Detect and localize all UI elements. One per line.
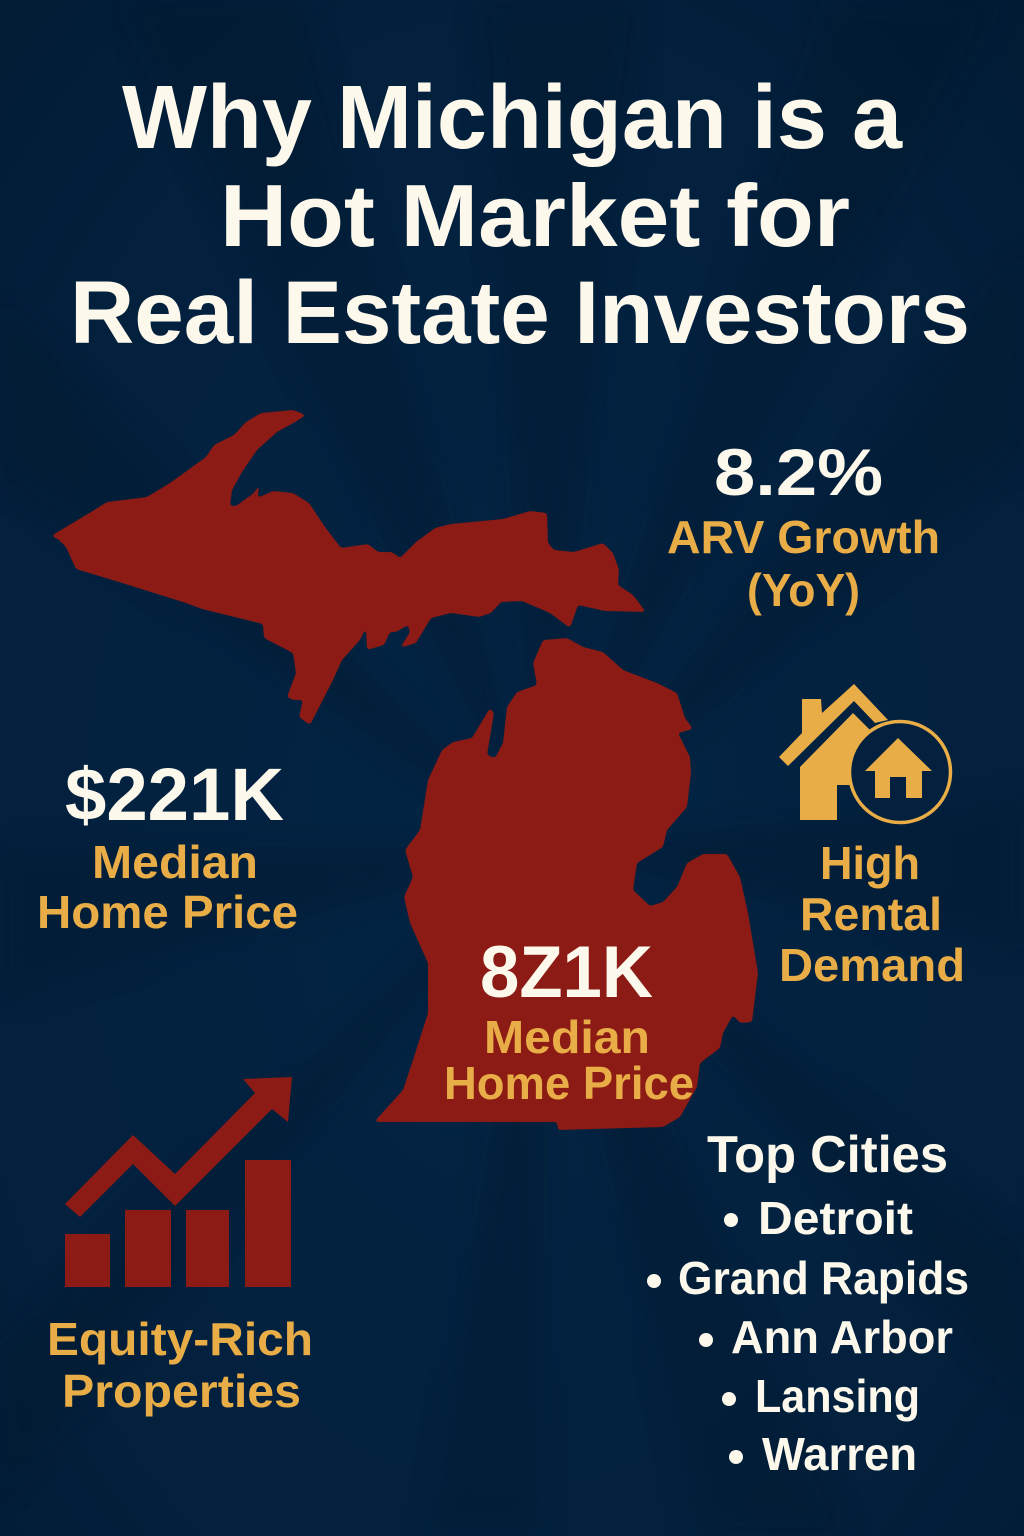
stat: ARV growth: 8.2% [714, 435, 883, 509]
title: Why Michigan is a [122, 68, 903, 168]
stat: $221K median home price: $221K [65, 753, 284, 836]
list: top cities: Lansing [755, 1370, 920, 1422]
chart icon: rising bars and arrow [65, 1077, 292, 1287]
stat: median home price on map: Median [484, 1011, 650, 1063]
stat: $221K median home price [37, 753, 298, 938]
stat: median home price on map: 8Z1K [480, 932, 653, 1013]
icon: house with rental badge [779, 684, 950, 822]
label: high rental demand [779, 837, 965, 991]
title [70, 68, 970, 362]
map: Michigan upper peninsula [51, 410, 646, 725]
label: high rental demand: Rental [800, 888, 942, 940]
stat: $221K median home price: Median [92, 836, 258, 888]
stat: $221K median home price: Home Price [37, 886, 298, 938]
title: Hot Market for [220, 166, 850, 265]
label: equity-rich properties: Equity-Rich [47, 1313, 313, 1365]
list: top cities: Top Cities [707, 1126, 948, 1184]
stat: median home price on map [444, 932, 694, 1109]
list: top cities: Detroit [758, 1192, 913, 1244]
list: top cities: Grand Rapids [678, 1252, 969, 1304]
stat: median home price on map: Home Price [444, 1057, 694, 1109]
label: equity-rich properties: Properties [62, 1365, 301, 1417]
title: Real Estate Investors [70, 262, 970, 362]
list: top cities: Warren [762, 1428, 917, 1480]
list: top cities: Ann Arbor [731, 1311, 953, 1363]
stat: ARV growth: (YoY) [747, 564, 860, 616]
label: equity-rich properties [47, 1313, 313, 1417]
map: Michigan lower peninsula [374, 638, 758, 1130]
stat: ARV growth [667, 435, 940, 616]
stat: ARV growth: ARV Growth [667, 511, 940, 563]
list: top cities [647, 1126, 969, 1480]
label: high rental demand: High [820, 837, 920, 889]
label: high rental demand: Demand [779, 939, 965, 991]
